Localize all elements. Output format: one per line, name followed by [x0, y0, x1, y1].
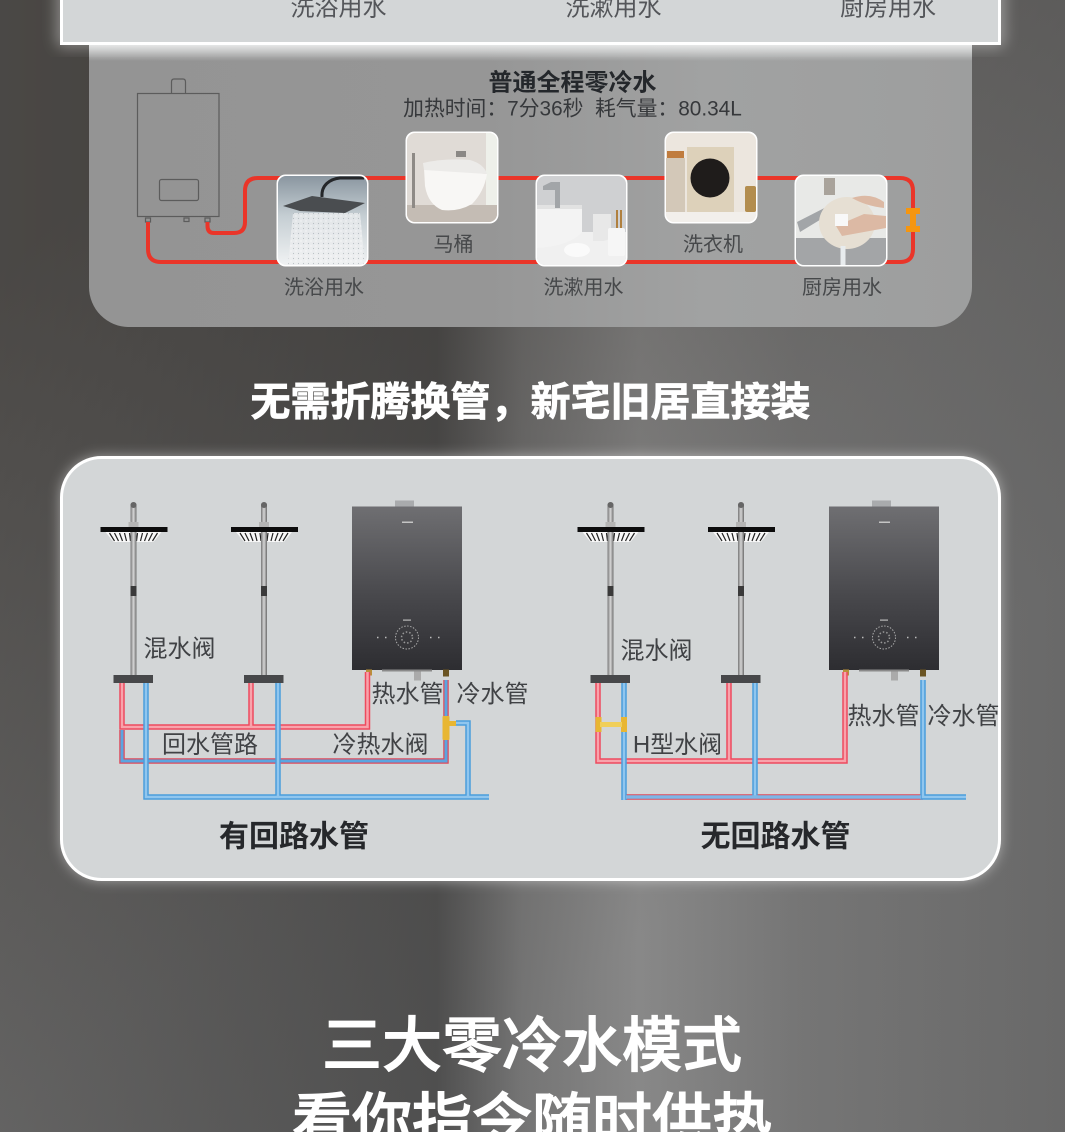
- red circulation pipe: [148, 178, 913, 262]
- caption: without return: 无回路水管: [700, 820, 850, 854]
- shower 1: [100, 502, 168, 683]
- H valve: [596, 717, 627, 732]
- label: kitchen water: 厨房用水: [802, 276, 882, 299]
- icon: orange valve: [906, 208, 920, 232]
- diagram: with return pipe: [100, 500, 528, 854]
- title: three zero-cold-water modes: 三大零冷水模式: [322, 1012, 742, 1080]
- panel: top card fragment: [56, 0, 1005, 48]
- tee valve: [442, 716, 456, 740]
- icon: heater outline: [138, 79, 219, 222]
- photo: kitchen dishwashing: [794, 174, 888, 266]
- water heater: [352, 500, 462, 680]
- return pipes: [122, 680, 446, 761]
- photo: toilet: [406, 132, 498, 224]
- water heater: [829, 500, 939, 680]
- photo: shower: [276, 174, 368, 266]
- label: bath water: 洗浴用水: [284, 276, 364, 299]
- panel: pipe comparison: [62, 458, 1000, 880]
- shower 2: [231, 502, 298, 683]
- cold water pipes with red edge: [624, 680, 966, 800]
- panel: regular full-loop zero-cold-water: [89, 45, 972, 327]
- label: hot pipe: 热水管: [372, 681, 444, 708]
- label: return pipe: 回水管路: [162, 732, 258, 758]
- diagram: without return pipe: [578, 500, 1000, 854]
- heating time and gas use: 加热时间：7分36秒 耗气量：80.34L: [403, 98, 742, 120]
- label: H valve: H型水阀: [633, 732, 722, 758]
- caption: with return: 有回路水管: [219, 820, 369, 854]
- hot water pipes: [598, 672, 845, 761]
- heading: 无需折腾换管，新宅旧居直接装: [250, 380, 810, 424]
- label: mixing valve: 混水阀: [144, 636, 216, 662]
- label: hot pipe: 热水管: [848, 703, 920, 730]
- label: cold pipe: 冷水管: [456, 681, 528, 708]
- title: three zero-cold-water modes: [292, 1012, 772, 1132]
- hot water pipes: [122, 672, 368, 727]
- label: mixing valve: 混水阀: [620, 638, 692, 664]
- label: wash water: 洗漱用水: [544, 276, 624, 299]
- label: hot-cold valve: 冷热水阀: [332, 732, 428, 758]
- cold water pipes: [146, 683, 489, 797]
- photo: washbasin: [536, 174, 628, 266]
- label: toilet: 马桶: [434, 233, 474, 256]
- photo: washing machine: [664, 132, 758, 224]
- label: cold pipe: 冷水管: [928, 703, 1000, 730]
- label: washing machine: 洗衣机: [683, 233, 743, 256]
- shower 2: [708, 502, 775, 683]
- panel title: 普通全程零冷水: [488, 70, 656, 96]
- shower 1: [578, 502, 644, 683]
